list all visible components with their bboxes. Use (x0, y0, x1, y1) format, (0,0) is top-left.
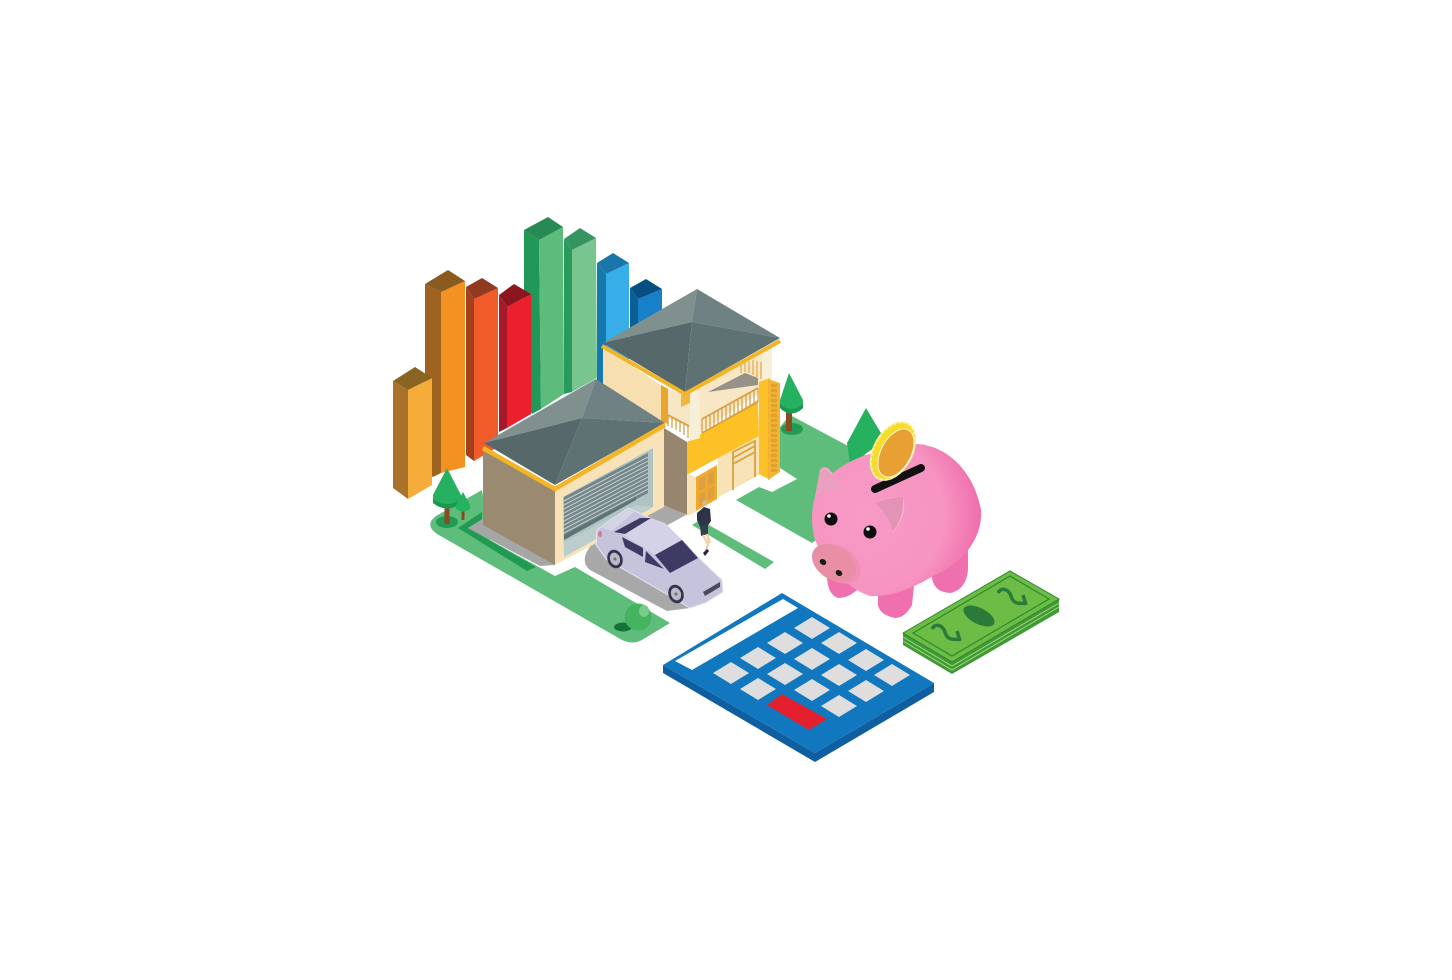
calculator side (663, 665, 934, 762)
bar 5 green (524, 217, 564, 414)
car shadow (585, 540, 690, 611)
rear wheel (605, 548, 625, 570)
dollar sign right (998, 589, 1027, 605)
calculator (663, 593, 934, 762)
tree: behind piggy bank (847, 408, 885, 465)
windshield (655, 540, 698, 573)
house (433, 289, 1059, 762)
bar 6 light green (564, 228, 597, 394)
right eye (864, 526, 876, 538)
right ear (875, 497, 904, 532)
balcony column left (690, 389, 700, 441)
garage left wall (483, 450, 555, 565)
side windows (622, 537, 664, 569)
entry door wall (718, 436, 759, 497)
tail light (598, 531, 602, 537)
entry door frame (733, 441, 755, 490)
balcony upper railing (741, 360, 761, 379)
bar 7 blue (597, 253, 629, 395)
lawn: front left (430, 490, 670, 642)
driveway (610, 505, 686, 540)
display (675, 599, 798, 670)
back leg (932, 545, 968, 593)
upper roof (602, 289, 780, 394)
piggy bank (805, 413, 981, 618)
stack lines (903, 603, 1059, 670)
red key (767, 694, 827, 730)
garage opening (563, 448, 653, 557)
garage roof (483, 379, 665, 489)
car body (596, 508, 723, 608)
coin (860, 413, 926, 489)
balcony back wall (668, 345, 772, 432)
front leg (878, 585, 914, 618)
car roof (623, 518, 682, 555)
slot (875, 468, 921, 489)
balcony floor (708, 373, 758, 392)
rear window (614, 518, 651, 534)
small window (681, 393, 690, 407)
upper storey (602, 289, 780, 516)
cash stack (903, 571, 1059, 674)
bar chart (393, 217, 662, 499)
stack side (903, 599, 1059, 674)
cream lower wall (687, 474, 696, 516)
front wheel (666, 583, 686, 605)
side balcony railing (668, 415, 689, 438)
dollar sign left (932, 625, 961, 641)
yellow column (759, 378, 780, 480)
bill centre oval (960, 601, 998, 631)
car (596, 508, 723, 608)
garage (483, 379, 665, 565)
garage interior floor (564, 505, 653, 557)
keys (713, 617, 910, 717)
bar 8 dark blue (630, 279, 662, 345)
bar 3 orange red (466, 278, 498, 461)
lawn: narrow strip (692, 520, 774, 569)
person (697, 500, 711, 556)
rear deck (602, 509, 634, 531)
garage side wall (664, 428, 687, 515)
snout leg (827, 575, 857, 598)
garage front wall (555, 428, 664, 565)
left ear (815, 467, 850, 497)
bill top (903, 571, 1059, 662)
bill border (913, 576, 1049, 656)
tree: left small (456, 492, 470, 520)
bush (614, 604, 652, 632)
left ear inner (815, 469, 846, 496)
calculator top (663, 593, 934, 753)
balcony column right (762, 347, 772, 387)
lawn: right side (736, 415, 865, 543)
body (812, 444, 981, 596)
roller shutter (564, 453, 648, 540)
snout (805, 536, 868, 592)
double door (696, 465, 717, 511)
bar 2 orange (425, 270, 465, 477)
orange pillar (661, 385, 668, 424)
concrete path (468, 519, 555, 566)
front balcony railing (702, 388, 758, 433)
car grille (703, 582, 720, 596)
tree: left large (433, 468, 461, 528)
tree: right (780, 373, 803, 435)
bar 4 red (499, 284, 531, 432)
hedge strip (458, 512, 536, 571)
main yellow wall (687, 400, 760, 497)
bar 1 light orange (393, 367, 432, 499)
upper left wall (603, 346, 668, 428)
left eye (824, 512, 838, 526)
